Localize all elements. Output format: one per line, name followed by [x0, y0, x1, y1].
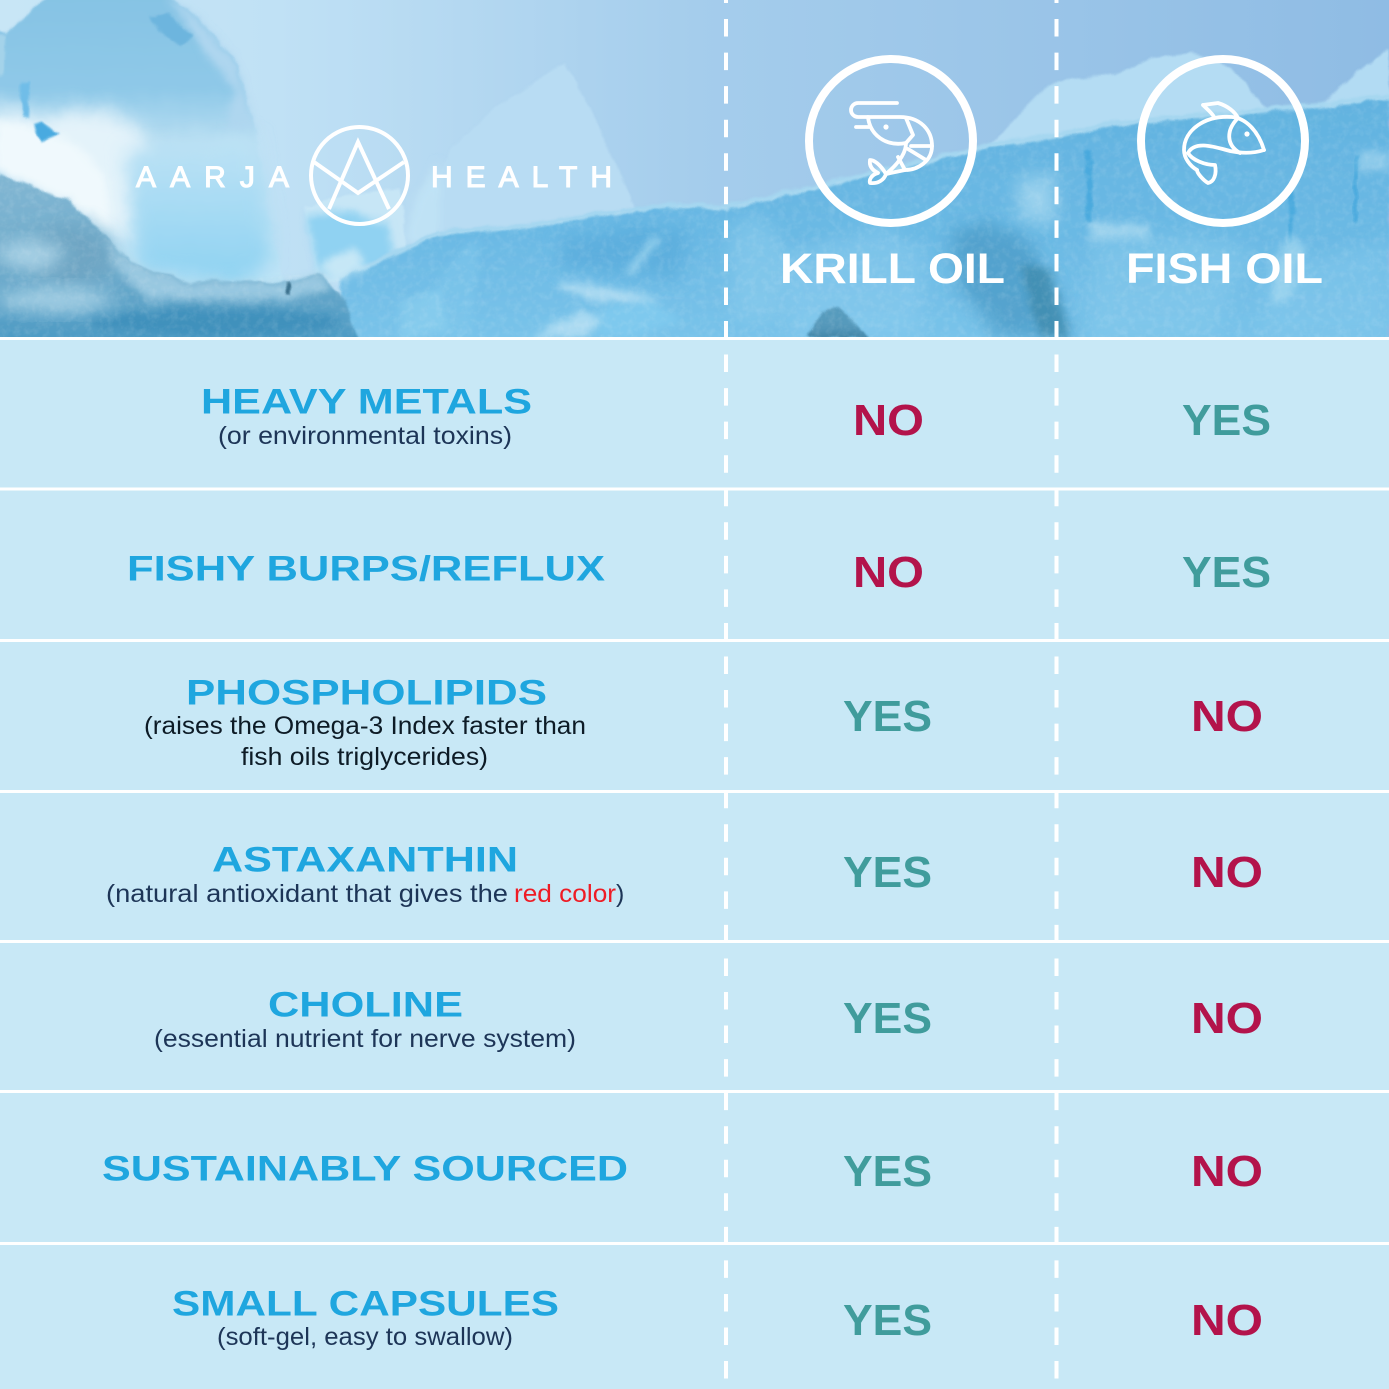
dashed column dividers	[726, 0, 1056, 1389]
icon: fish	[1184, 103, 1264, 183]
row 2: fishy burps: FISHY BURPS/REFLUX	[127, 550, 606, 588]
row 4: astaxanthin: (natural antioxidant that gives the	[106, 880, 508, 908]
row 6: sustainably sourced	[102, 1147, 1263, 1196]
translucent rear berg	[510, 66, 634, 224]
column header: krill oil: KRILL OIL	[780, 245, 1005, 293]
row 6: sustainably sourced: YES	[843, 1147, 932, 1196]
row 3: phospholipids: PHOSPHOLIPIDS	[186, 674, 547, 712]
row 3: phospholipids: YES	[843, 692, 932, 741]
row 5: choline: YES	[843, 994, 932, 1043]
row 5: choline: (essential nutrient for nerve system)	[154, 1025, 576, 1053]
texture on mid-left shelf	[460, 250, 473, 260]
row 7: small capsules: YES	[843, 1296, 932, 1345]
row 6: sustainably sourced: NO	[1191, 1147, 1263, 1196]
row 4: astaxanthin: YES	[843, 848, 932, 897]
row 3: phospholipids: fish oils triglycerides)	[241, 743, 488, 771]
icon: shrimp	[851, 103, 932, 183]
row 1: heavy metals: NO	[853, 396, 924, 445]
lump in front of pillar	[318, 250, 366, 282]
logo: Aarja Health: HEALTH	[431, 161, 612, 194]
row 3: phospholipids: (raises the Omega-3 Index faster than	[144, 712, 586, 740]
row 7: small capsules: (soft-gel, easy to swallow)	[217, 1323, 513, 1351]
logo: Aarja Health	[136, 127, 612, 224]
row 2: fishy burps: YES	[1182, 548, 1271, 597]
row 1: heavy metals: HEAVY METALS	[201, 382, 532, 422]
row divider lines	[0, 337, 1389, 1245]
krill/fish background ice patches	[1017, 175, 1055, 222]
column header: fish oil	[1126, 59, 1323, 293]
header photo: iceberg	[0, 0, 1389, 345]
icon: logo mark	[311, 127, 408, 224]
table background	[0, 338, 1389, 1389]
row 1: heavy metals: YES	[1182, 396, 1271, 445]
row 1: heavy metals: (or environmental toxins)	[218, 422, 512, 450]
row 3: phospholipids: NO	[1191, 692, 1263, 741]
column header: krill oil	[780, 59, 1005, 293]
row 4: astaxanthin: red color	[514, 880, 616, 908]
row 6: sustainably sourced: SUSTAINABLY SOURCED	[102, 1150, 628, 1188]
row 5: choline	[154, 986, 1263, 1053]
row 2: fishy burps	[127, 548, 1271, 597]
row 4: astaxanthin	[106, 840, 1263, 908]
row 7: small capsules	[172, 1284, 1263, 1351]
row 4: astaxanthin: ASTAXANTHIN	[212, 840, 518, 880]
row 3: phospholipids	[144, 674, 1263, 771]
row 4: astaxanthin: )	[616, 880, 624, 908]
row 1: heavy metals	[201, 382, 1271, 450]
row 5: choline: CHOLINE	[268, 986, 463, 1024]
big left berg	[0, 0, 256, 142]
row 2: fishy burps: NO	[853, 548, 924, 597]
row 4: astaxanthin: NO	[1191, 848, 1263, 897]
left foreground ice	[0, 173, 360, 345]
main right ice shelf and snow caps	[990, 53, 1267, 145]
logo: Aarja Health: AARJA	[136, 161, 289, 194]
row 7: small capsules: NO	[1191, 1296, 1263, 1345]
row 7: small capsules: SMALL CAPSULES	[172, 1284, 559, 1324]
row 5: choline: NO	[1191, 994, 1263, 1043]
column header: fish oil: FISH OIL	[1126, 245, 1323, 293]
